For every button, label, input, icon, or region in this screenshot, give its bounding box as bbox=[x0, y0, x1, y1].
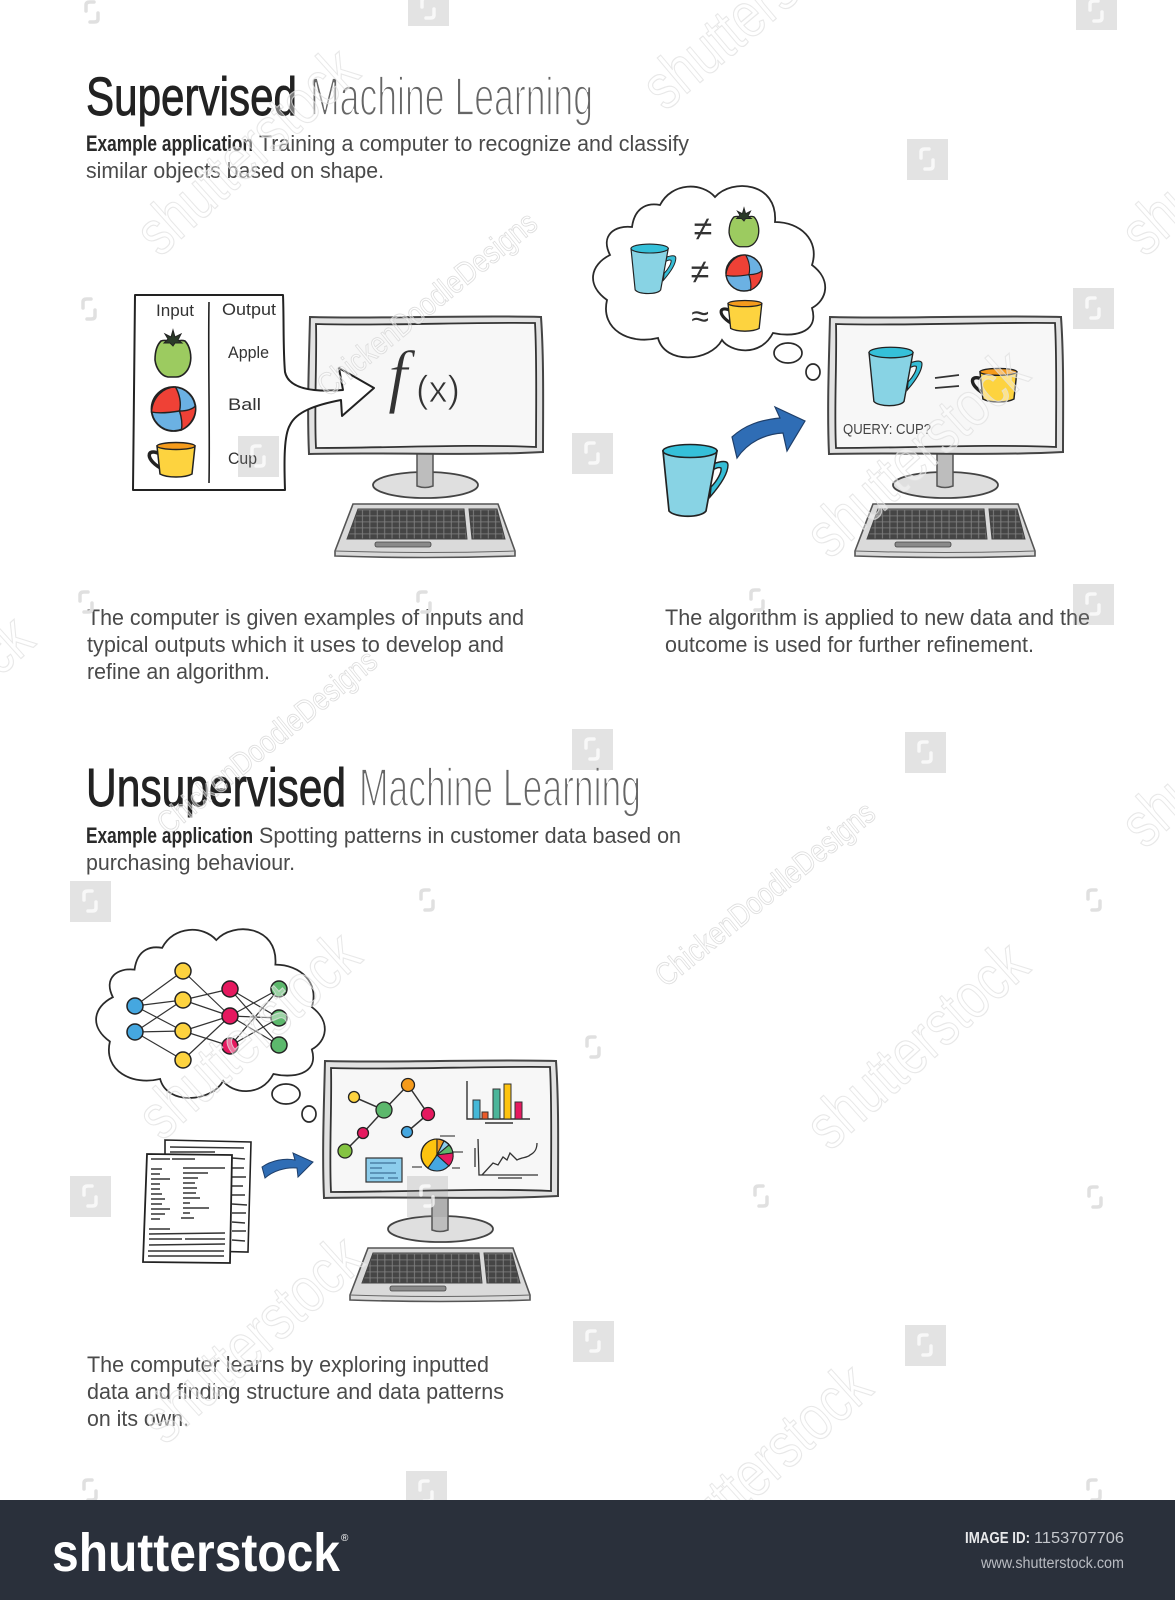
equals sign bbox=[935, 375, 959, 388]
text: training description: refine an algorithm. bbox=[87, 659, 270, 684]
thought bubble small bbox=[302, 1106, 316, 1122]
panel: training illustration bbox=[133, 295, 543, 558]
watermark layer: shutterstock bbox=[123, 916, 374, 1152]
arrow: blue bbox=[262, 1153, 313, 1178]
table labels: Ball bbox=[228, 395, 261, 414]
text: training description: The computer is given examples of inputs and bbox=[87, 605, 524, 630]
text: unsupervised example application: Example application bbox=[86, 823, 253, 848]
formula f(x): f bbox=[388, 338, 416, 415]
title: Supervised Machine Learning: Supervised bbox=[86, 67, 297, 127]
icon: blue cup in cloud bbox=[631, 244, 676, 294]
text: supervised example application: Training a computer to recognize and classify bbox=[259, 131, 689, 156]
monitor: training bbox=[308, 316, 543, 558]
formula f(x): (x) bbox=[416, 369, 460, 411]
line chart on screen bbox=[475, 1139, 538, 1178]
watermark layer: shutterstock bbox=[791, 334, 1042, 570]
thought cloud: comparison bbox=[593, 186, 825, 357]
arrow: blue bbox=[732, 407, 805, 458]
formula f(x) bbox=[388, 338, 460, 415]
image id: 1153707706 bbox=[1034, 1530, 1124, 1547]
image id: IMAGE ID: bbox=[965, 1530, 1030, 1547]
comparison symbols: ≠ bbox=[691, 253, 709, 291]
data card on screen bbox=[366, 1158, 402, 1182]
panel: unsupervised illustration bbox=[96, 929, 558, 1302]
comparison symbols: ≠ bbox=[694, 210, 712, 248]
table labels bbox=[156, 300, 276, 468]
thought bubble large bbox=[272, 1084, 300, 1104]
watermark layer: shutterstock bbox=[634, 1348, 885, 1584]
comparison symbols bbox=[691, 210, 712, 334]
text: unsupervised example application: purchasing behaviour. bbox=[86, 850, 295, 875]
query label: QUERY: CUP? bbox=[843, 422, 931, 438]
text: training description: typical outputs which it uses to develop and bbox=[87, 632, 504, 657]
website: www.shutterstock.com bbox=[980, 1555, 1124, 1572]
title: Unsupervised Machine Learning: Machine Learning bbox=[359, 758, 641, 818]
title: Supervised Machine Learning bbox=[86, 67, 593, 127]
icon: yellow cup in cloud bbox=[721, 300, 762, 331]
bar chart on screen bbox=[467, 1081, 530, 1123]
network graph on screen bbox=[338, 1078, 434, 1158]
text: unsupervised description: on its own. bbox=[87, 1406, 189, 1431]
text: supervised example application: similar objects based on shape. bbox=[86, 158, 384, 183]
neural network bbox=[127, 963, 287, 1068]
panel: query illustration bbox=[593, 186, 1063, 558]
watermark layer: shutterstock bbox=[126, 1220, 377, 1456]
monitor: unsupervised bbox=[323, 1060, 558, 1302]
text: supervised example application: Example application bbox=[86, 131, 253, 156]
icon: blue cup on screen bbox=[869, 347, 922, 406]
watermark layer: ChickenDoodleDesigns bbox=[310, 204, 544, 403]
thought bubble large bbox=[774, 343, 802, 363]
monitor: query bbox=[828, 316, 1063, 558]
title: Supervised Machine Learning: Machine Learning bbox=[310, 67, 593, 127]
watermark layer: shutterstock bbox=[791, 926, 1042, 1162]
footer logo: shutterstock bbox=[52, 1523, 341, 1583]
icon: yellow cup bbox=[149, 442, 195, 477]
footer bar bbox=[0, 1500, 1175, 1600]
text: supervised example application bbox=[86, 131, 689, 183]
title: Unsupervised Machine Learning: Unsupervised bbox=[86, 758, 346, 818]
table labels: Input bbox=[156, 301, 194, 320]
text: unsupervised description bbox=[87, 1352, 504, 1431]
title: Unsupervised Machine Learning bbox=[86, 758, 641, 818]
text: unsupervised description: The computer learns by exploring inputted bbox=[87, 1352, 489, 1377]
comparison symbols: ≈ bbox=[691, 298, 709, 334]
watermark layer: ChickenDoodleDesigns bbox=[150, 642, 384, 841]
image id bbox=[965, 1530, 1124, 1547]
watermark layer: ChickenDoodleDesigns bbox=[648, 794, 882, 993]
thought cloud: neural network bbox=[96, 929, 325, 1098]
table labels: Output bbox=[222, 300, 276, 319]
icon: apple bbox=[155, 330, 191, 377]
text: query description: outcome is used for further refinement. bbox=[665, 632, 1034, 657]
text: unsupervised example application bbox=[86, 823, 681, 875]
icon: ball bbox=[152, 387, 196, 431]
pie chart on screen bbox=[412, 1136, 463, 1171]
icon: ball in cloud bbox=[726, 255, 762, 291]
icon: new blue cup bbox=[663, 444, 728, 516]
table divider bbox=[208, 302, 210, 483]
text: unsupervised description: data and finding structure and data patterns bbox=[87, 1379, 504, 1404]
footer logo: ® bbox=[341, 1533, 349, 1544]
icon: apple in cloud bbox=[729, 208, 759, 247]
text: unsupervised example application: Spotting patterns in customer data based on bbox=[259, 823, 681, 848]
text: query description bbox=[665, 605, 1090, 657]
text: training description bbox=[87, 605, 524, 684]
icon: yellow cup on screen bbox=[972, 368, 1017, 402]
text: query description: The algorithm is applied to new data and the bbox=[665, 605, 1090, 630]
input output table with arrow bbox=[133, 295, 374, 490]
thought bubble small bbox=[806, 364, 820, 380]
table labels: Apple bbox=[228, 343, 269, 362]
table labels: Cup bbox=[228, 449, 257, 468]
documents bbox=[143, 1140, 251, 1263]
